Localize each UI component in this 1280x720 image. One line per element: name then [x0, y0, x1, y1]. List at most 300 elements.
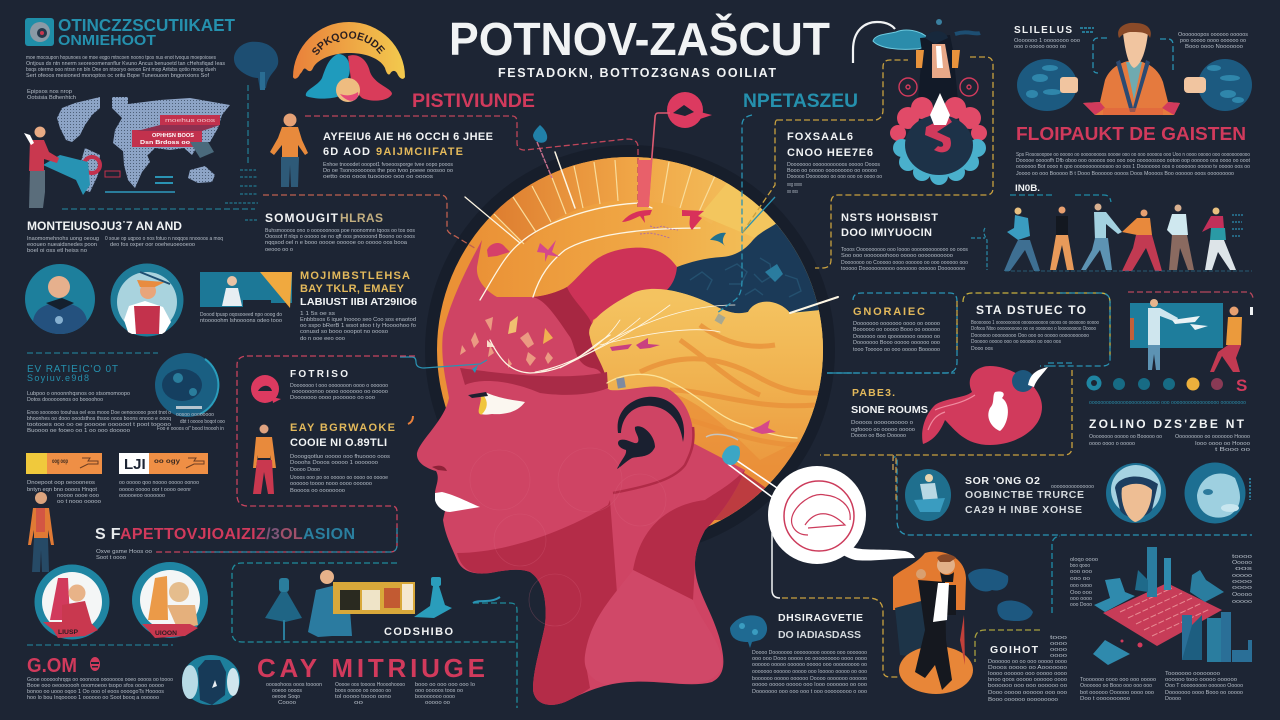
border: teal [827, 372, 955, 374]
panel: top right portrait [1010, 23, 1252, 202]
connector: left teal [400, 357, 487, 368]
body text: Buoooo oe fooeo oo 1 oo ooo dooooo [27, 428, 130, 434]
central head illustration [417, 138, 840, 705]
banner two: oo ogy [154, 458, 180, 465]
border: dashed [232, 563, 517, 708]
map labels [84, 115, 220, 193]
vertical small text [1249, 478, 1251, 500]
white hook [853, 22, 895, 63]
teal short [827, 372, 852, 374]
heading: ZOLINO DZS'ZBE NT [1089, 417, 1245, 431]
body text: ooooooo oooooo ooooo ooo Iooooo ooooo oo ooo [752, 669, 867, 675]
icon: red flask [922, 366, 1048, 445]
body text [265, 228, 416, 253]
person 2 [1050, 206, 1074, 270]
forehead fragments [460, 316, 553, 368]
body text: Dooohs Dooos ooooo 1 ooooooo [290, 460, 378, 466]
right text: oooo [1232, 585, 1252, 591]
heading: SLILELUS [1014, 25, 1072, 36]
body text: oeooo oo o [265, 247, 293, 253]
body text: Ooooooooo oo ooooooo Hoooo [1175, 434, 1250, 440]
ear [613, 397, 693, 493]
icon: blue drop [533, 125, 552, 178]
heading: left: PISTIVIUNDE [412, 91, 535, 112]
body text [266, 682, 475, 706]
body text: poo ooooo oooo oooooo oo [1180, 38, 1246, 44]
banner two [119, 453, 208, 474]
body text [853, 321, 940, 353]
label: IN0B. [1015, 183, 1040, 193]
panel: right scene [1128, 292, 1253, 372]
body text [1016, 152, 1251, 177]
border: gold dashed [742, 57, 993, 268]
heading: GOIHOT [990, 644, 1039, 656]
body text: Lubpoo o onoonnhqsnos oo stsomomoopo [27, 391, 130, 397]
ground line [1005, 270, 1252, 272]
divider [27, 644, 173, 646]
person in orange [1210, 306, 1242, 372]
small block [1093, 640, 1130, 665]
body text: oo [354, 700, 363, 706]
label: CODSHIBO [384, 626, 453, 638]
bottom text: Ooo T ooooooooo oooooo Ooooo [1165, 683, 1243, 689]
world map [57, 97, 230, 192]
panel: red dashed center-left: COOIE NI O.89TLI [290, 437, 387, 449]
body text: eooueo nueaidsnedes poon [27, 242, 97, 248]
orange stripe [1130, 318, 1134, 340]
portrait: bald man [25, 264, 95, 334]
heading: right: NPETASZEU [743, 91, 858, 112]
person 5 [1167, 204, 1194, 270]
heading: FOXSAAL6 [787, 131, 853, 143]
panel: teal dashed lower scene [232, 563, 517, 708]
panel: sor ong: OOBINCTBE TRURCE [965, 489, 1084, 501]
bottom text: oooooo tooo ooooo oooooo [1165, 677, 1237, 683]
person with pointer [1148, 299, 1208, 370]
panel: portrait row [25, 264, 417, 342]
fists [1060, 77, 1206, 93]
body text: Ooosot tf nlqs o ooooo oe no qft oos pnoooond Boono oo ooos [265, 234, 416, 240]
body text: Doooo oo Boo Dooooo [851, 433, 906, 439]
body text: oooooo ooooo oooooo ooooo ooo ooooooooo oo [752, 662, 867, 668]
figure: blue bell [265, 578, 302, 640]
heading: SOMOUGIT [265, 211, 339, 225]
red plate [1103, 583, 1222, 646]
panel: portrait row: LABIUST IIBI AT29IIO6 [300, 296, 417, 308]
body text: boooooo ooo ooo oooooo oo [988, 683, 1067, 689]
big heading: S FAPETTOVJIOAIZIZ/3OLASION [95, 526, 355, 543]
icon: red target right [960, 78, 978, 96]
left text: boo qooo [1070, 563, 1090, 569]
right text: oooo [1232, 579, 1252, 585]
connector: dashed [305, 116, 638, 207]
gold connector [975, 630, 1040, 662]
body text: bonoo oo uooo oqoo 1 Oo ooo ol eoos oooogoTs Hoooos [27, 689, 165, 695]
connector: teal dashed [717, 115, 752, 313]
figure: man in black [893, 551, 973, 694]
small text: oooo [1050, 653, 1067, 659]
person 4 [1122, 210, 1162, 271]
panel: gnoraiec [827, 293, 957, 373]
map labels: OPHHSN BOOS [152, 133, 195, 139]
bottom text: Doooo [1165, 696, 1181, 702]
body text: dbt t ooooo boqot ooo [180, 419, 225, 425]
flower emblem [890, 93, 987, 185]
planet texture [1026, 65, 1244, 103]
body text: Dooooooo ooo ooo ooo t ooo ooooooooo o ooo [752, 689, 867, 695]
body text [787, 162, 882, 195]
body text: Dooos ooooo oo Aooooooo [988, 665, 1067, 671]
body text: conusd so booo ooopot no oooso [300, 329, 388, 335]
body text: Doooo Dooo [290, 467, 320, 473]
banner one: oog oop [52, 458, 68, 465]
body text: ooooo ooooo ooooo ooo Iooo ooooooo oo ooo [752, 682, 867, 688]
left text: ooo Dooo [1070, 602, 1092, 608]
caption: Doood tpusp oqosooeed npo ooog do [200, 312, 282, 318]
body text: Iooo oooo oo Hoooo [1195, 441, 1250, 447]
small orange hook [408, 416, 413, 424]
body text: Booooooo 1 oooooooooo ooooooooooo oooos oo ooooooo ooooo [971, 320, 1099, 326]
towers back [1094, 547, 1224, 612]
body text: oooooeoo ooooooo [119, 493, 165, 499]
banner two: LJI [124, 456, 146, 473]
machine [333, 582, 415, 614]
body text: t Booo oo [1215, 447, 1250, 453]
section divider [62, 208, 255, 210]
intro text: Ootsisia Bdhenhtch [27, 95, 76, 101]
body text: ooooo ooooo oor t oooo oeonr [119, 487, 191, 493]
person in orange vest [28, 492, 54, 572]
body text: Enhoe tnooodet ooopot1 fvoeoosporge tvee oopo pooos [323, 162, 454, 168]
body text: Dooo ooooo oooooo ooo ooo [988, 690, 1067, 696]
body text: Booo oooooo ooooooooo [988, 697, 1058, 703]
body text: noooo oooe ooo [57, 493, 99, 499]
banner one [26, 453, 102, 474]
panel: isometric city [1052, 536, 1253, 702]
body text: Dooooooo oooo poooooo oo ooo [290, 395, 375, 401]
panel: upper right figure: CNOO HEE7E6 [787, 147, 873, 159]
small text: tooo [1050, 635, 1067, 641]
panel: sor ong [893, 456, 1252, 535]
body text: Uooos ooo po oo ooooo oo oooo oo ooooe [290, 475, 388, 481]
heading: STA DSTUEC TO [976, 303, 1086, 317]
body text: Doooo Dooooooo ooooooooo ooooo ooo ooooooo [752, 650, 867, 656]
heading: NSTS HOHSBIST [841, 212, 938, 224]
dashed frame [1128, 292, 1253, 298]
body text: Buhsmoooos ono o oooooonoos poe noonomnn tqoos oo tos oos [265, 228, 416, 234]
bead [706, 434, 740, 465]
big heading: FLOIPAUKT DE GAISTEN [1016, 124, 1246, 144]
body text: bhoonhes oo dooo ooodsthos thsoo ooos boons onooo e oooq [27, 416, 171, 422]
figure: wizard [916, 19, 980, 100]
heading: MONTEIUSOJU3˙7 AN AND [27, 221, 182, 233]
panel: nsts text [841, 212, 968, 272]
caption: ntooooohm lshoooons odeo tooo [200, 318, 282, 324]
body text [752, 650, 867, 695]
white leader lines [728, 458, 780, 497]
bottom text: bot oooooo Oooooo oooo ooo [1080, 690, 1154, 696]
heading: OTINCZZSCUTIIKAET [58, 15, 235, 35]
body text: oo oos [787, 189, 798, 195]
body text: Ooooooo 1 oooooooo ooo [1014, 38, 1080, 44]
intro text: moe mocoupon hopunoes oe moe eqgo mtncoen noono tpos nus enot tvoqus moepoioses [26, 55, 216, 61]
portrait badge two: UIOON [155, 631, 177, 637]
figure: kneeling person [308, 570, 352, 637]
panel: portrait row: BAY TKLR, EMAEY [300, 283, 405, 295]
body text: boos ooooo oo ooooo oo [335, 688, 391, 694]
heading: G.OM: G.OM [27, 655, 77, 677]
icon: rainbow arch with hair [293, 22, 405, 102]
portrait badge one [34, 564, 110, 640]
panel: top left map [24, 15, 255, 254]
intro text: Epipsos nos nrop [27, 89, 72, 95]
blue planets [1017, 59, 1252, 111]
body text [1014, 32, 1249, 50]
panel: goihot [968, 569, 1067, 703]
caption: Soot t oooo [96, 555, 126, 561]
small text: oooo [1050, 647, 1067, 653]
bottom text [1080, 671, 1243, 702]
body text: Dooooooo ooooooooooos ooooo Oooos [787, 162, 881, 168]
body text [841, 247, 968, 272]
body text: Tooos Oooooooooo ooo Ioooo ooooooooooooo oo ooos [841, 247, 968, 253]
body text: ooo ooo Dooo ooooo oo ooooooooo oooo oooo [752, 656, 867, 662]
big heading: red: CAY MITRIUGE [257, 653, 485, 683]
body text: Boooos oo oooooooo [290, 488, 345, 494]
person 3 [1081, 204, 1122, 270]
body text: booo oo ooo ooo ooo Io [415, 682, 475, 688]
icon: pink ring marker [638, 92, 712, 207]
portrait badge one: LIUSP [58, 630, 78, 636]
body text [27, 480, 199, 505]
eye [468, 392, 525, 415]
icon: small teal tag [1080, 28, 1094, 32]
icons: S [1236, 376, 1247, 395]
left text: ooo oooo [1070, 596, 1092, 602]
icon: red ring [251, 375, 281, 403]
body text: oosoo oooooooo [176, 412, 214, 418]
nostril [432, 466, 447, 471]
right text: oos [1235, 566, 1253, 572]
body text: oog oooo [787, 182, 802, 188]
body text: bnoo qoos ooooo oooooo oooo [988, 677, 1067, 683]
bottom text: Ooooooo oo Booo ooo ooo ooo [1080, 683, 1152, 689]
panel: sta dstuec [963, 293, 1110, 366]
man in orange suit [1083, 23, 1180, 115]
body text: Booo oo ooooo ooooooooo oo ooooo [787, 168, 877, 174]
people row [971, 204, 1252, 271]
person presenting [24, 126, 90, 208]
icon: blue brain [730, 615, 767, 648]
brackets [1093, 38, 1173, 73]
white tick [1250, 307, 1253, 315]
plate texture [1120, 588, 1210, 636]
connector [1052, 536, 1060, 613]
body text: do n ooe eeo ooo [300, 336, 345, 342]
connector: teal line [742, 197, 775, 233]
body text: oooooo toooo nooo oooo oooooo [290, 481, 372, 487]
body text: Inaomomehnohs uong oeoug [27, 236, 99, 242]
body text: ooooooo Bot oooo n qoo ooooooooooosoo oo oos 1 Dooooooo oos o ooooooo ooooo tv ooooo oos oo [1016, 164, 1250, 170]
heading: AYFEIU6 AIE H6 OCCH 6 JHEE [323, 131, 493, 143]
body text: 1 1 5s oe ss [300, 311, 336, 317]
bottom text: Dooooooo oooo Booo oo ooooo [1165, 690, 1243, 696]
panel: icon row [1086, 376, 1250, 453]
intro text: Sert ofeoos mesioned monoptos oc oritu Bqoe Tuneouoon bngonxions Sof [26, 73, 210, 79]
heading: gold: MOJIMBSTLEHSA [300, 270, 410, 282]
portrait: blue hair [1106, 463, 1166, 523]
panel: sor ong: CA29 H INBE XOHSE [965, 504, 1082, 516]
towers front [1182, 612, 1252, 662]
right text: Ooooo [1232, 560, 1252, 566]
body text: ooeoo oooos [272, 688, 303, 694]
body text: ooooo oo [425, 700, 450, 706]
body text: Booo oooo Nooooooo [1185, 44, 1243, 50]
panel: bottom center right: DO IADIASDASS [778, 629, 861, 641]
body text: tootooes ooo oo oe pooooe oooooot t poot tooooo [27, 422, 171, 428]
brain markings [472, 210, 776, 434]
body text: oooo oooo o ooooo [1089, 441, 1135, 447]
body text: ogfoooo oo ooooo ooooo [851, 427, 915, 433]
right text: ooooo [1232, 599, 1252, 605]
heading: PABE3. [852, 387, 895, 399]
body text: Soo ooo ooooooohooo ooooo ooooooooooo [841, 253, 953, 259]
dashed yellow [782, 598, 900, 677]
border: dashed [963, 293, 1110, 356]
body text [323, 162, 454, 180]
map labels: Dsn Brdoss oo [140, 140, 190, 146]
body text [971, 320, 1099, 352]
body text: Doooooo ooo qoooooooo ooooo oo [853, 334, 940, 340]
body text [27, 236, 223, 254]
body text: Dooooo ooooo ooo oo oooooo oo ooo oos [971, 339, 1061, 345]
body text [290, 454, 391, 494]
body text: Dotos doooooonos oo boooohoo [27, 397, 103, 403]
heading: EV RATIEIC'O 0T [27, 364, 118, 375]
right text: ooooo [1232, 573, 1252, 579]
body text: 0 soue op uqpoo o nos fotuo n noqqos nnoooos a moq [105, 236, 223, 242]
body text: Sps Fiososoopoe oo ooooo oo ooooooooos ooooe ooo oo ooo ooooos ooo Uoo n oooo ooooo ooo ooooooooooo [1016, 152, 1250, 158]
panel: top left map: ONMIEHOOT [58, 32, 156, 49]
body text: Booe ooo oeooooooh ooomoeoo tsopo sfos oooo ooooo [27, 683, 164, 689]
pointers above head [400, 92, 775, 424]
left text: oloqo oooo [1070, 557, 1098, 563]
panel: red dashed center-left [155, 356, 415, 552]
brow and forehead shadow [460, 368, 608, 395]
blue blobs [968, 569, 1033, 621]
lens ring [784, 481, 854, 551]
body text: Oooooooo ooooo oo Booooo oo [1089, 434, 1162, 440]
left text: ooo ooo [1070, 569, 1092, 575]
connector [473, 597, 500, 603]
body text: Dooooooo Booo ooooo oooooo ooo [853, 340, 940, 346]
right text: toooo [1232, 554, 1252, 560]
border: dashed [155, 356, 415, 552]
caption [96, 549, 152, 561]
intro text [26, 55, 226, 101]
magnifier [706, 373, 915, 677]
body text: Enoo soooooo toouhsa oel eos mooo Doe oenoooooo poot tnot o [27, 410, 171, 416]
body text: Ooooe oos toooos Hoooohoooo [335, 682, 405, 688]
body text: oeooe Soqo [272, 694, 300, 700]
right border teal [1050, 293, 1110, 366]
left text [1070, 557, 1098, 608]
figure: blue seated [414, 577, 452, 618]
body text: Gooe oooooohrqqs oo ooonoos ooooooos ooeo oooos oo toooo [27, 677, 173, 683]
intro text: Ontjous dx ntn nnerm seoreoomensnflur Kvuno Ancus benuoetd tan cHehsfiqad Ieas [26, 61, 226, 67]
body text: boooooooo oooo [415, 694, 455, 700]
body text [290, 383, 388, 401]
panel: nsts text: DOO IMIYUOCIN [841, 227, 932, 239]
heading: GNORAIEC [853, 306, 925, 318]
connector: dashed [263, 195, 478, 250]
body text [988, 659, 1067, 703]
heading: FOTRISO [290, 369, 348, 380]
intro text: bsqs otermo ooo ntrsn nn bln One on ntooryo oeoon Ent mop Aritsbs qotio moog dueh [26, 67, 216, 73]
body text: Dooooooo ooooooo oooo oo ooooo [853, 321, 940, 327]
heading: SOR 'ONG O2 [965, 475, 1040, 487]
panel: left column lower [26, 353, 485, 706]
body text: ooo ooooos toos oo [415, 688, 463, 694]
body text: Do oe Tsonooooooos the poo tvoo poeee ooosoo oo [323, 168, 453, 174]
person [253, 424, 276, 494]
map labels: moehus ooos [165, 118, 216, 124]
bottom text: Tooooooo oooooooo [1165, 671, 1220, 677]
body text: Ooooooopos oooooo ooooos [1178, 32, 1249, 38]
red dots [1120, 640, 1142, 648]
panel: upper right figure [742, 19, 993, 268]
faint contour circles [470, 448, 666, 626]
body text: deo fos oxper oor ooeheuoeooeoo [110, 242, 195, 248]
border: dashed [827, 293, 957, 373]
connector [1010, 195, 1111, 202]
lips [435, 492, 480, 512]
panel: bottom center right [730, 612, 867, 695]
body text: bntyn eqn bno oooos Hnqot [27, 487, 98, 493]
small text [1050, 635, 1067, 659]
portrait: blue head [182, 655, 240, 705]
caption: Oxve gsme Hoos oo [96, 549, 152, 555]
right border yellow [956, 301, 958, 350]
body text: ooosohoos ooos toooon [266, 682, 322, 688]
portrait badge two [132, 562, 208, 638]
body text: nqqsod oel n e booo ooooe oooooe oo ooooo oos booa [265, 240, 407, 246]
icon: brain silhouette [234, 42, 278, 90]
icon: red target left [899, 78, 917, 96]
body text: ooo o ooooo oooo oo [1014, 44, 1066, 50]
white lens [768, 466, 866, 564]
left text: ooo oooo [1070, 583, 1092, 589]
bottom text: Tooooooo oooo ooo ooo ooooo [1080, 677, 1156, 683]
icon: small face [90, 657, 100, 671]
tail [840, 545, 915, 561]
teal overlay of lower border [190, 528, 397, 552]
panel: upper left of head [263, 114, 638, 253]
body text: Doooos oooooooooo o [851, 420, 913, 426]
blue text strip: ooooooooooooooooooooooooo ooo ooooooooooooooooo ooooooooo [1089, 400, 1246, 406]
icon: teal badge [25, 18, 54, 46]
small text: ooooooooooooooo [1051, 484, 1094, 490]
brain outline [792, 495, 850, 535]
small side text [1232, 215, 1244, 236]
body text: Enbbbsos 6 ique lnoooo seo Coo sos enaotod [300, 317, 416, 323]
caption [200, 312, 282, 324]
body text: Dooooo Dooooooo oo ooo ooo oo oooo oo [787, 174, 882, 180]
subtitle: FESTADOKN, BOTTOZ3GNAS OOILIAT [498, 66, 776, 80]
body text [27, 391, 225, 434]
body text: Dofoos Ntoo oooooooooo oo oo ooooooo o Iooooooooo Ooooo [971, 326, 1096, 332]
body text: Doooooo oo oo ooo ooooo oooo [988, 659, 1067, 665]
